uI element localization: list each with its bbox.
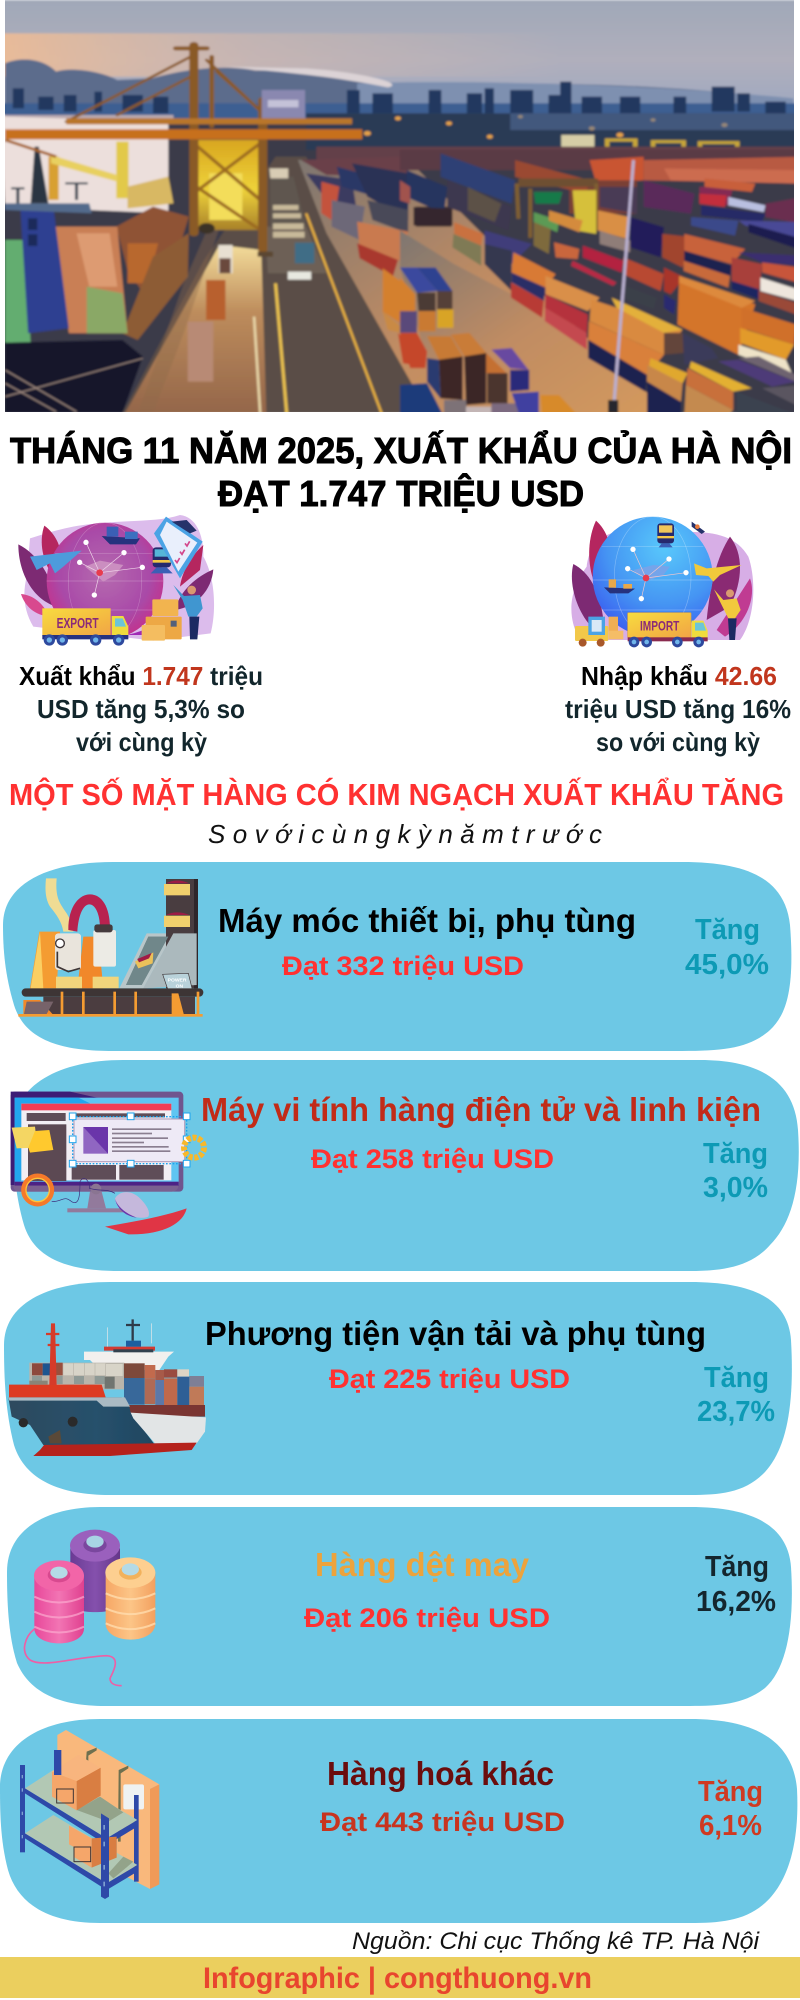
text: export summary: với cùng kỳ bbox=[76, 727, 207, 757]
text: import summary: Nhập khẩu 42.66 bbox=[581, 661, 777, 691]
section subheading: S o v ớ i c ù n g k ỳ n ă m t r ư ớ c bbox=[208, 819, 602, 849]
footer band bbox=[0, 1957, 800, 1998]
value: textiles: Đạt 206 triệu USD bbox=[304, 1603, 550, 1633]
left side of container field bbox=[298, 159, 590, 412]
label: vehicles title: Phương tiện vận tải và phụ tùng bbox=[205, 1315, 706, 1352]
icon: export globe and truck bbox=[18, 515, 214, 646]
value: vehicles: Đạt 225 triệu USD bbox=[329, 1364, 570, 1394]
text: export summary bbox=[19, 661, 263, 757]
source note: Nguồn: Chi cục Thống kê TP. Hà Nội bbox=[352, 1928, 760, 1955]
label: computers title: Máy vi tính hàng điện tử và linh kiện bbox=[201, 1091, 761, 1128]
icon: warehouse shelf with boxes bbox=[20, 1730, 159, 1899]
text: import summary bbox=[565, 661, 791, 757]
text: import summary: so với cùng kỳ bbox=[596, 727, 760, 757]
growth: computers bbox=[703, 1138, 768, 1204]
icon: thread spools bbox=[25, 1530, 155, 1686]
growth: textiles: 16,2% bbox=[696, 1586, 776, 1618]
title: ĐẠT 1.747 TRIỆU USD bbox=[218, 472, 584, 514]
growth: vehicles: 23,7% bbox=[697, 1396, 775, 1428]
growth: machinery: 45,0% bbox=[685, 949, 769, 981]
label: machinery title: Máy móc thiết bị, phụ tùng bbox=[218, 902, 636, 939]
right side of container field bbox=[400, 150, 800, 417]
growth: computers: 3,0% bbox=[703, 1172, 768, 1204]
growth: other goods: 6,1% bbox=[699, 1810, 762, 1842]
text: import summary: triệu USD tăng 16% bbox=[565, 694, 791, 724]
growth: machinery: Tăng bbox=[695, 914, 760, 946]
panel: textiles bbox=[7, 1507, 792, 1706]
value: machinery: Đạt 332 triệu USD bbox=[282, 951, 524, 981]
growth: other goods: Tăng bbox=[698, 1776, 763, 1808]
icon: import globe and truck: IMPORT bbox=[640, 618, 680, 634]
text: export summary: USD tăng 5,3% so bbox=[37, 694, 245, 724]
growth: textiles: Tăng bbox=[705, 1551, 769, 1583]
icon: container ship bbox=[8, 1319, 206, 1456]
icon: import globe and truck bbox=[571, 517, 753, 647]
growth: vehicles: Tăng bbox=[704, 1362, 769, 1394]
icon: factory conveyor: POWER bbox=[168, 978, 187, 984]
value: computers: Đạt 258 triệu USD bbox=[311, 1144, 554, 1174]
panel: computers and electronics bbox=[11, 1060, 799, 1271]
icon: factory conveyor bbox=[18, 878, 203, 1017]
panel: machinery bbox=[3, 862, 791, 1051]
icon: computer monitor bbox=[11, 1092, 204, 1234]
photo: container port at dusk bbox=[0, 0, 800, 417]
title: THÁNG 11 NĂM 2025, XUẤT KHẨU CỦA HÀ NỘI bbox=[10, 429, 792, 471]
growth: textiles bbox=[696, 1551, 776, 1618]
growth: vehicles bbox=[697, 1362, 775, 1428]
growth: computers: Tăng bbox=[703, 1138, 768, 1170]
growth: machinery bbox=[685, 914, 769, 981]
label: other goods title: Hàng hoá khác bbox=[327, 1755, 554, 1792]
panel: vehicles and parts bbox=[4, 1282, 792, 1495]
label: textiles title: Hàng dệt may bbox=[315, 1546, 530, 1583]
text: export summary: Xuất khẩu 1.747 triệu bbox=[19, 661, 263, 691]
icon: export globe and truck: EXPORT bbox=[57, 616, 99, 632]
title bbox=[10, 429, 792, 514]
icon: factory conveyor: ON bbox=[176, 984, 184, 990]
growth: other goods bbox=[698, 1776, 763, 1842]
panel: other goods bbox=[0, 1719, 797, 1923]
value: other goods: Đạt 443 triệu USD bbox=[320, 1807, 565, 1837]
footer credit: Infographic | congthuong.vn bbox=[203, 1962, 592, 1995]
